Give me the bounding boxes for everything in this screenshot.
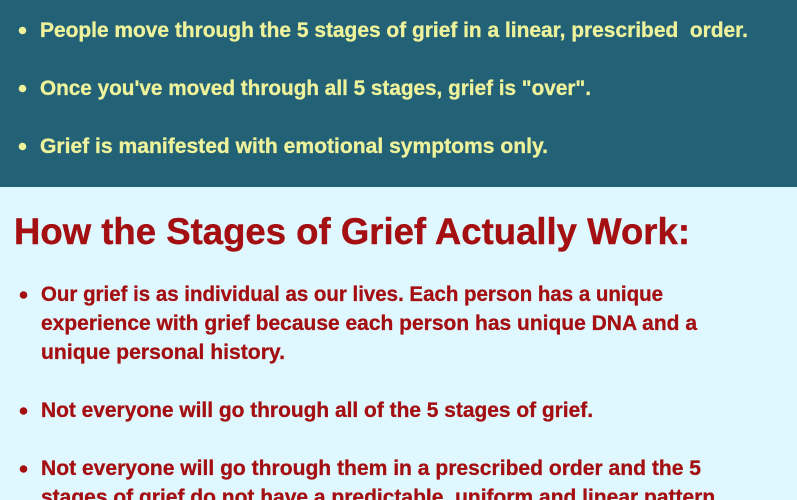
fact bullet 1 bbox=[20, 283, 697, 364]
fact bullet 1: unique personal history. bbox=[41, 341, 285, 364]
myth bullet 3: Grief is manifested with emotional symptoms only. bbox=[40, 135, 548, 158]
myth bullet 1: People move through the 5 stages of grief in a linear, prescribed order. bbox=[40, 19, 748, 42]
heading: How the Stages of Grief Actually Work: bbox=[14, 211, 690, 252]
fact bullet 1: Our grief is as individual as our lives. Each person has a unique bbox=[41, 283, 663, 306]
fact bullet 3: Not everyone will go through them in a prescribed order and the 5 bbox=[41, 457, 701, 480]
fact bullet 3 bbox=[20, 457, 721, 500]
panel: how the stages actually work bbox=[0, 187, 797, 500]
myth bullet 2: Once you've moved through all 5 stages, grief is "over". bbox=[40, 77, 591, 100]
panel: grief myths bbox=[0, 0, 797, 187]
fact bullet 2: Not everyone will go through all of the 5 stages of grief. bbox=[41, 399, 593, 422]
fact bullet 1: experience with grief because each person has unique DNA and a bbox=[41, 312, 697, 335]
